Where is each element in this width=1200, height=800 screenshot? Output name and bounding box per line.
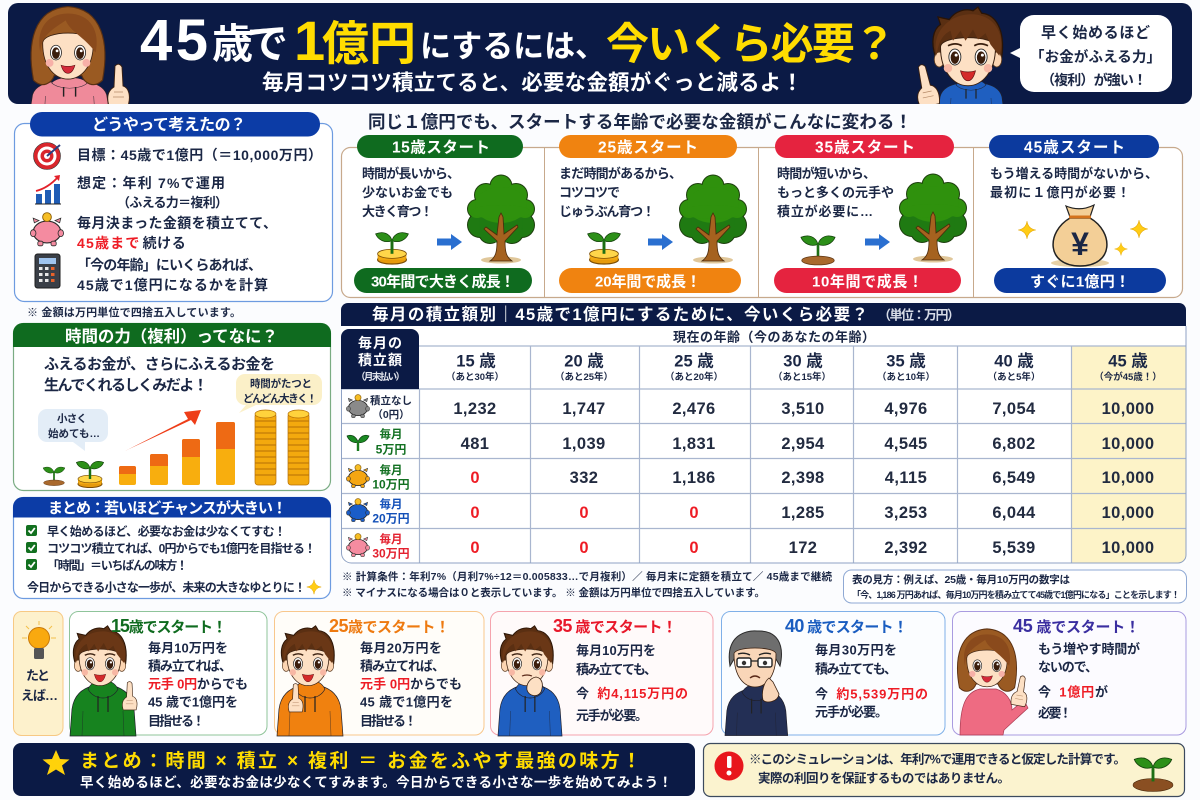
heading: start age comparison: 同じ１億円でも、スタートする年齢で必要な金額がこんなに変わる！	[368, 112, 912, 132]
row: 300k: 0	[689, 539, 699, 557]
card: for example	[14, 612, 63, 736]
title: 億円	[322, 17, 416, 70]
row: 50k: 1,831	[672, 435, 716, 453]
row: none: 2,476	[672, 400, 716, 418]
footnotes	[342, 570, 832, 599]
column headers: （今が45歳！）	[1094, 371, 1162, 383]
callout: start small: 始めても…	[48, 427, 100, 440]
card: start at 35: 積立が必要に…	[777, 204, 873, 219]
card: example 15: 元手 0円からでも	[148, 676, 248, 692]
card: start at 25: じゅうぶん育つ！	[559, 204, 655, 219]
table reading note	[844, 570, 1186, 603]
card: start at 25: まだ時間があるから、	[559, 166, 682, 181]
footnotes: ※ マイナスになる場合は０と表示しています。 ※ 金額は万円単位で四捨五入しています。	[342, 586, 765, 599]
card: start at 35: 35歳スタート	[815, 138, 915, 156]
row: 100k: 332	[570, 469, 598, 487]
text: calculation: 45歳で1億円になるかを計算	[77, 277, 268, 293]
card: start at 35	[774, 135, 967, 293]
row: 200k: 0	[689, 504, 699, 522]
header cell: 毎月の	[358, 335, 402, 351]
row: none: （0円）	[372, 408, 410, 421]
row: 200k: 10,000	[1102, 504, 1154, 522]
card: example 40: 毎月30万円を	[815, 642, 897, 658]
column headers: 20 歳	[564, 352, 604, 370]
panel: how we thought	[14, 112, 332, 302]
card: start at 35: 10年間で成長！	[812, 272, 923, 290]
card: start at 45: 45歳スタート	[1024, 138, 1125, 156]
row: 100k	[346, 463, 1154, 492]
column headers: 15 歳	[456, 352, 496, 370]
column headers: 45 歳	[1108, 352, 1148, 370]
panel: savings table	[341, 303, 1186, 563]
card: start at 15: 15歳スタート	[392, 138, 490, 156]
card: example 45: 45 歳でスタート！	[1013, 616, 1140, 636]
icon: rising chart	[35, 175, 61, 204]
card: start at 25: コツコツで	[559, 185, 620, 200]
card: example 25: 25歳でスタート！	[329, 616, 450, 636]
character: older man	[725, 631, 788, 736]
checklist: 「時間」＝いちばんの味方！	[47, 558, 188, 572]
card: start at 45	[989, 135, 1166, 293]
heading: 時間の力（複利）ってなに？	[65, 326, 278, 346]
card: example 15: 積み立てれば、	[148, 658, 232, 674]
row: 50k: 4,545	[884, 435, 928, 453]
table reading note: 表の見方：例えば、25歳・毎月10万円の数字は	[852, 573, 1070, 586]
text: monthly saving: 毎月決まった金額を積立てて、	[77, 215, 277, 231]
explanation text	[44, 355, 275, 394]
card: example 25: 45 歳で1億円を	[360, 694, 453, 710]
column headers	[446, 352, 1162, 383]
column headers: （あと30年）	[446, 371, 504, 383]
panel: disclaimer: ※このシミュレーションは、年利7%で運用できると仮定した計算です。	[749, 752, 1126, 766]
callout: start small	[38, 409, 108, 451]
row: 300k: 2,392	[884, 539, 928, 557]
table title bar: 毎月の積立額別｜45歳で1億円にするために、今いくら必要？	[372, 304, 868, 324]
banner: summary	[13, 743, 695, 796]
card: example 45: 必要！	[1038, 706, 1072, 720]
card: example 40	[722, 612, 945, 736]
row: none: 1,232	[453, 400, 497, 418]
icon: target	[34, 142, 60, 170]
card: start at 25	[559, 135, 747, 293]
row: 50k: 1,039	[562, 435, 606, 453]
row: 200k: 0	[579, 504, 589, 522]
callout: time passes: 時間がたつと	[250, 377, 312, 390]
card: example 15: 45 歳で1億円を	[148, 694, 238, 710]
column headers: （あと15年）	[773, 371, 831, 383]
card: start at 25: 20年間で成長！	[595, 272, 701, 290]
row: 300k: 毎月	[380, 532, 402, 546]
column headers: 40 歳	[994, 352, 1034, 370]
row: 300k	[346, 532, 1154, 560]
card: example 25	[274, 612, 484, 736]
speech bubble	[1010, 15, 1172, 92]
callout: time passes	[236, 374, 322, 413]
card: for example: たと	[26, 668, 50, 683]
row: 50k: 2,954	[781, 435, 825, 453]
callout: time passes: どんどん大きく！	[243, 392, 317, 405]
row: 50k: 10,000	[1102, 435, 1154, 453]
card: example 25: 目指せる！	[360, 714, 417, 728]
character: woman pointing	[30, 7, 129, 111]
subtitle: 毎月コツコツ積立てると、必要な金額がぐっと減るよ！	[262, 70, 803, 95]
row: none	[346, 394, 1154, 421]
card: example 15	[70, 612, 267, 736]
title	[140, 8, 896, 73]
title: 歳で	[212, 21, 288, 67]
checklist	[26, 524, 316, 572]
explanation text: ふえるお金が、さらにふえるお金を	[44, 355, 275, 373]
arrow: growth	[125, 410, 201, 451]
character: boy thinking	[498, 626, 562, 736]
card: example 15: 目指せる！	[148, 714, 205, 728]
character: boy pointing	[917, 6, 1004, 104]
panel: summary young	[13, 497, 331, 598]
row: 200k: 20万円	[372, 512, 410, 526]
checklist: コツコツ積立てれば、0円からでも1億円を目指せる！	[47, 540, 316, 556]
icon: sprout small	[43, 467, 65, 486]
explanation text: 生んでくれるしくみだよ！	[44, 377, 208, 394]
row: 50k: 5万円	[376, 442, 406, 456]
icon: money bag	[1051, 205, 1109, 267]
row: 100k: 0	[470, 469, 480, 487]
row: 50k: 481	[461, 435, 489, 453]
header banner	[8, 3, 1192, 113]
column headers: 25 歳	[674, 352, 714, 370]
text: goal: 目標：45歳で1億円（＝10,000万円）	[77, 147, 322, 163]
row: none: 積立なし	[370, 394, 412, 407]
card: example 15: 毎月10万円を	[148, 640, 228, 656]
card: example 35: 積み立てても、	[576, 662, 657, 677]
row: 100k: 毎月	[380, 463, 402, 477]
title: 1	[294, 9, 325, 72]
column headers: （あと10年）	[877, 371, 935, 383]
card: example 45	[952, 612, 1186, 735]
text: calculation	[77, 257, 268, 293]
panel: start age cards	[342, 135, 1182, 298]
icon: piggy bank	[30, 213, 64, 246]
speech bubble: 「お金がふえる力」	[1030, 48, 1161, 66]
row: 200k: 1,285	[781, 504, 825, 522]
character: boy thumbs up	[70, 626, 137, 736]
column headers: 30 歳	[783, 352, 823, 370]
card: start at 45: 最初に１億円が必要！	[990, 185, 1130, 200]
row: none: 7,054	[992, 400, 1036, 418]
card: example 35: 元手が必要。	[576, 708, 648, 723]
title: にするには、	[420, 29, 606, 64]
table title bar: （単位：万円）	[878, 308, 960, 322]
coin stacks	[255, 410, 309, 485]
header cell: 積立額	[358, 352, 402, 368]
icon: calculator	[35, 254, 60, 288]
icon: money bag: ¥	[1071, 226, 1089, 262]
row: none: 1,747	[562, 400, 606, 418]
panel: disclaimer: 実際の利回りを保証するものではありません。	[758, 770, 1010, 786]
text: assumption: 想定：年利 7%で運用	[77, 175, 225, 191]
icon: star	[42, 750, 70, 775]
card: example 25: 毎月20万円を	[360, 640, 442, 656]
panel: disclaimer	[704, 744, 1184, 796]
row: 200k: 3,253	[884, 504, 928, 522]
row: 200k	[346, 497, 1154, 526]
row: 100k: 2,398	[781, 469, 825, 487]
card: start at 35: 時間が短いから、	[777, 166, 876, 181]
row: 200k: 6,044	[992, 504, 1036, 522]
row: 100k: 4,115	[885, 469, 927, 487]
row: 100k: 10万円	[372, 478, 410, 492]
card: example 35: 毎月10万円を	[576, 643, 656, 658]
text: assumption	[77, 175, 228, 210]
table title bar	[341, 303, 1186, 326]
card: example 45: もう増やす時間が	[1038, 642, 1140, 656]
card: example 40: 40 歳でスタート！	[785, 616, 908, 636]
card: example 25: 積み立てれば、	[360, 658, 445, 674]
title: 45	[140, 8, 208, 73]
card: example 40: 元手が必要。	[815, 704, 888, 720]
panel: power of time	[13, 323, 331, 490]
card: start at 35: もっと多くの元手や	[777, 185, 894, 200]
icon: warning	[714, 752, 744, 780]
heading pill: どうやって考えたの？	[92, 116, 246, 134]
footnotes: ※ 計算条件：年利7%（月利7%÷12＝0.005833…で月複利）／ 毎月末に定額を積立て／ 45歳まで継続	[342, 570, 832, 583]
text: monthly saving: 45歳まで続ける	[77, 235, 186, 251]
row: 50k: 6,802	[992, 435, 1036, 453]
row: 200k: 0	[470, 504, 480, 522]
row: none: 10,000	[1102, 400, 1154, 418]
table reading note: 「今、1,186 万円あれば、毎月10万円を積み立てて45歳で1億円になる」ことを示します！	[852, 589, 1180, 600]
growth bars	[119, 422, 235, 485]
heading pill	[30, 112, 320, 136]
row: 50k	[347, 427, 1154, 456]
card: example 40: 今 約5,539万円の	[815, 686, 928, 702]
card: example 45: 今 1億円が	[1038, 684, 1108, 700]
header cell	[341, 329, 419, 389]
card: start at 45: もう増える時間がないから、	[990, 166, 1158, 181]
row: 50k: 毎月	[380, 427, 402, 441]
title: 今いくら必要？	[606, 21, 896, 69]
card: example 35: 35 歳でスタート！	[553, 616, 677, 636]
card: for example: えば…	[21, 688, 58, 703]
card: example 40: 積み立てても、	[815, 662, 897, 676]
row: 300k: 0	[579, 539, 589, 557]
card: example 35: 今 約4,115万円の	[576, 686, 688, 701]
card: start at 15: 30年間で大きく成長！	[371, 272, 515, 290]
table grid	[341, 326, 1186, 563]
row: 100k: 1,186	[672, 469, 716, 487]
character: boy thumbs up	[277, 626, 343, 736]
row: 300k: 0	[470, 539, 480, 557]
row: 300k: 10,000	[1102, 539, 1154, 557]
row: 300k: 30万円	[372, 546, 410, 560]
column headers: （あと25年）	[555, 371, 613, 383]
row: none: 4,976	[884, 400, 928, 418]
axis label: 現在の年齢（今のあなたの年齢）	[673, 330, 875, 344]
row: none: 3,510	[781, 400, 825, 418]
card: start at 45: すぐに1億円！	[1030, 272, 1130, 290]
callout: start small: 小さく	[57, 412, 87, 425]
character: woman pointing	[957, 629, 1031, 735]
banner: summary: 早く始めるほど、必要なお金は少なくてすみます。今日からできる小さな一歩を始めてみよう！	[80, 774, 672, 790]
banner: summary: まとめ：時間 × 積立 × 複利 ＝ お金をふやす最強の味方！	[80, 749, 641, 772]
card: example 35	[490, 612, 713, 736]
row: 200k: 毎月	[380, 497, 402, 511]
row: 300k: 5,539	[992, 539, 1036, 557]
card: start at 15: 大きく育つ！	[362, 204, 433, 219]
icon: sprout on coin	[76, 461, 104, 488]
column headers: （あと5年）	[988, 371, 1040, 383]
card: start at 15: 時間が長いから、	[362, 166, 460, 181]
text: assumption: （ふえる力＝複利）	[117, 195, 228, 210]
card: start at 25: 25歳スタート	[598, 138, 698, 156]
speech bubble: 早く始めるほど	[1041, 24, 1150, 42]
card: example 15: 15歳でスタート！	[111, 616, 227, 636]
card: start at 15	[354, 135, 535, 293]
closing line: 今日からできる小さな一歩が、未来の大きなゆとりに！	[27, 580, 306, 594]
icon: sprout	[1133, 758, 1173, 792]
icon: light bulb	[22, 621, 56, 659]
column headers: （あと20年）	[665, 371, 723, 383]
checklist: 早く始めるほど、必要なお金は少なくてすむ！	[47, 524, 286, 538]
card: example 25: 元手 0円からでも	[360, 676, 462, 692]
row: 300k: 172	[789, 539, 817, 557]
row: 100k: 10,000	[1102, 469, 1154, 487]
column headers: 35 歳	[886, 352, 926, 370]
header cell: （月末払い）	[356, 371, 405, 383]
text: calculation: 「今の年齢」にいくらあれば、	[77, 257, 262, 273]
note: rounding: ※ 金額は万円単位で四捨五入しています。	[27, 305, 241, 319]
text: monthly saving	[77, 215, 277, 251]
row: 100k: 6,549	[992, 469, 1036, 487]
speech bubble: （複利）が強い！	[1041, 72, 1147, 88]
card: example 45: ないので、	[1038, 660, 1098, 674]
heading: まとめ：若いほどチャンスが大きい！	[48, 499, 287, 517]
card: start at 15: 少ないお金でも	[362, 185, 453, 200]
